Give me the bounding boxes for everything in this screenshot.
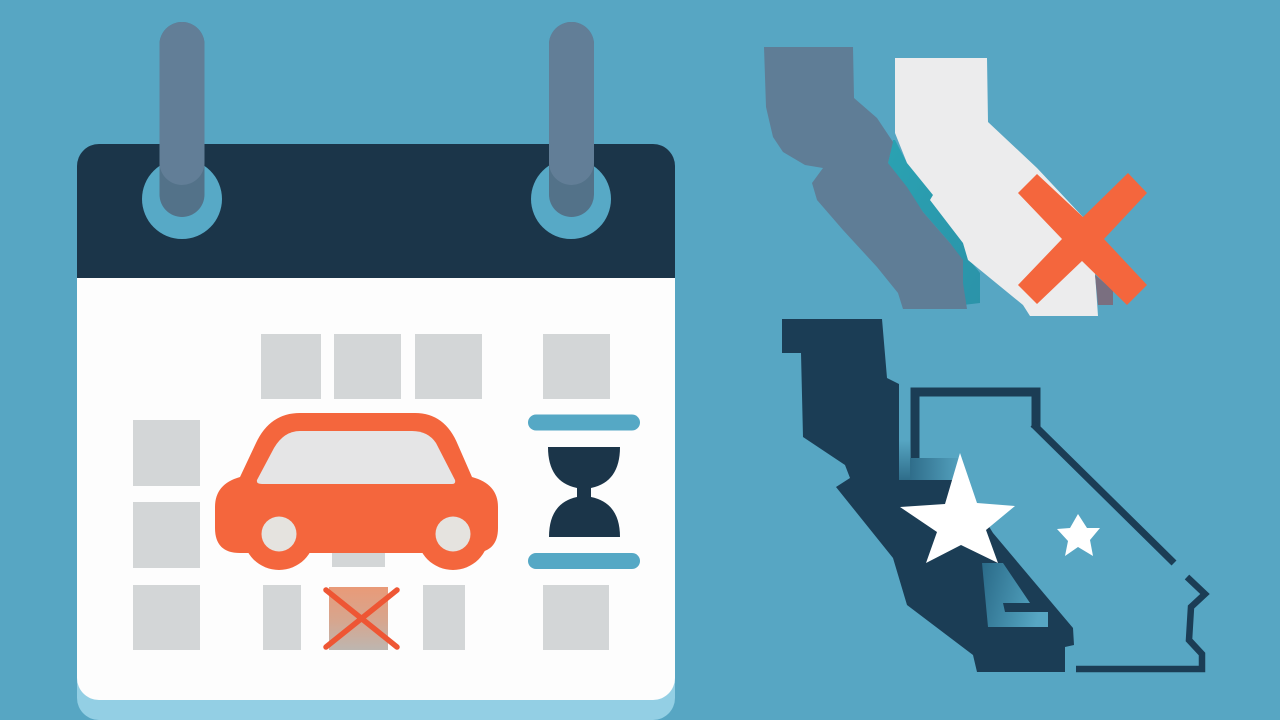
calendar header [77, 144, 675, 278]
icon: hourglass [528, 414, 640, 569]
map: white state shape with cross [895, 58, 1147, 316]
crossed out date [326, 587, 397, 650]
map: dark state shape with stars [782, 319, 1205, 672]
faded state detail [899, 440, 1048, 627]
icon: red cross [1018, 173, 1147, 305]
icon: large star [900, 453, 1015, 563]
binder ring left [142, 22, 222, 239]
icon: small star [1057, 514, 1100, 556]
state outline [915, 392, 1205, 669]
icon: car [215, 413, 498, 570]
calendar page [77, 270, 675, 720]
date cells [133, 334, 610, 650]
calendar [77, 22, 675, 720]
dark state fill [782, 319, 1074, 672]
map: grey state shape [764, 47, 980, 309]
binder ring right [531, 22, 611, 239]
